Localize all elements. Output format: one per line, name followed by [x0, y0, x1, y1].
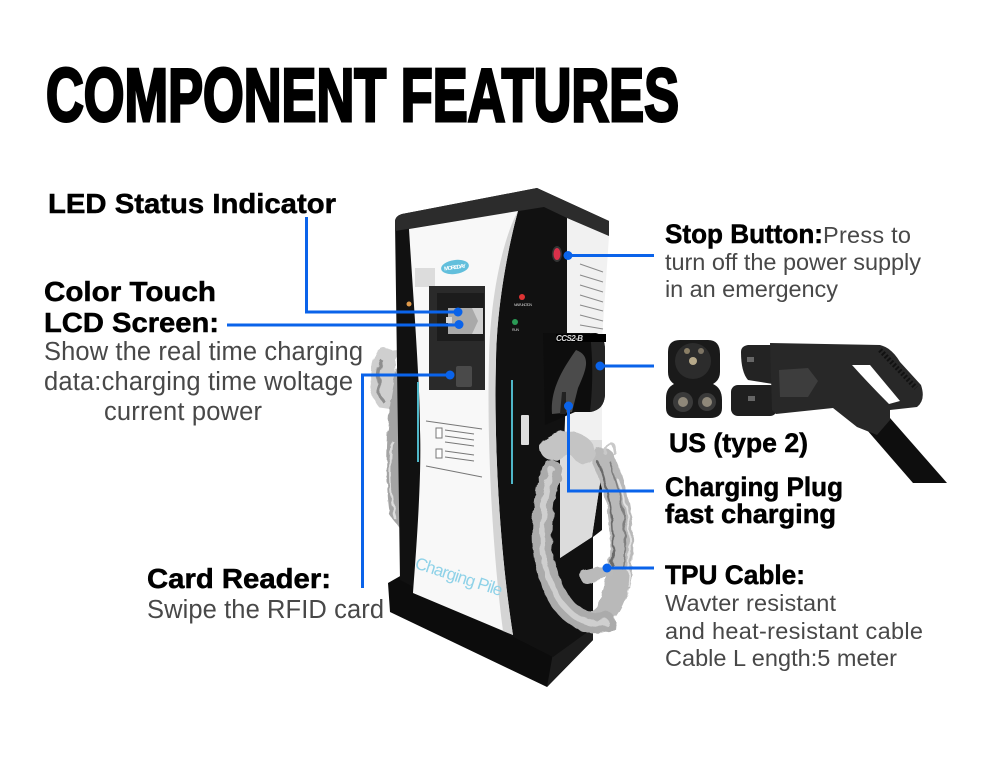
- label: color touch LCD screen: Show the real time charging: [44, 338, 363, 366]
- label: color touch LCD screen: data:charging time woltage: [44, 368, 353, 396]
- side vent panel: [560, 218, 609, 558]
- label: TPU cable: TPU Cable:: [665, 560, 805, 590]
- brand badge: MOREDAY: [444, 263, 467, 272]
- line: plug holster: [596, 362, 654, 370]
- front panel status lights: RUN: [512, 328, 519, 332]
- callout lines: [227, 217, 654, 588]
- cyan light strips: [418, 380, 512, 484]
- door handle: [521, 415, 529, 445]
- label: charging plug: Charging Plug: [665, 472, 843, 502]
- instruction text on panel: [426, 421, 482, 477]
- emergency stop button: [552, 246, 562, 262]
- lower barrel: [731, 385, 777, 416]
- label: card reader: Swipe the RFID card: [147, 596, 384, 624]
- label: card reader: Card Reader:: [147, 563, 331, 594]
- label: stop button: Stop Button:: [665, 219, 823, 249]
- label: charging plug: fast charging: [665, 499, 836, 529]
- front panel status lights: [406, 294, 532, 332]
- line: charging plug: [564, 402, 654, 491]
- charging pile illustration: [371, 188, 630, 687]
- front panel status lights: MALFUNCTION: [514, 303, 532, 307]
- CCS charging plug: [731, 343, 947, 483]
- label: color touch LCD screen: [44, 276, 363, 426]
- plug cable: [867, 418, 947, 483]
- upper barrel: [741, 345, 773, 384]
- label: stop button: Press to: [823, 222, 911, 248]
- label: card reader: [147, 563, 384, 624]
- label: TPU cable: and heat-resistant cable: [665, 618, 923, 644]
- base plinth: [388, 575, 593, 687]
- left cable in plastic wrap: [371, 348, 408, 532]
- plug holster: [543, 333, 606, 425]
- cabinet body: [395, 188, 609, 657]
- label: US type 2: US (type 2): [669, 428, 808, 458]
- line: TPU cable: [602, 564, 654, 572]
- white front panel: [409, 211, 518, 635]
- line: card reader: [362, 370, 454, 588]
- label: LED status indicator: LED Status Indicator: [48, 188, 336, 219]
- label: stop button: turn off the power supply: [665, 249, 921, 275]
- connector front view: [666, 340, 722, 418]
- notice sticker: [415, 268, 435, 287]
- plug handle and body: [770, 343, 923, 435]
- touch screen housing: [429, 286, 485, 390]
- label: color touch LCD screen: Color Touch: [44, 276, 216, 307]
- label: TPU cable: Wavter resistant: [665, 590, 836, 616]
- label: charging plug: [665, 472, 843, 529]
- label: stop button: in an emergency: [665, 276, 838, 302]
- line: LCD screen: [227, 320, 464, 329]
- right cable in plastic wrap: [542, 443, 630, 623]
- label: stop button: [665, 219, 921, 302]
- line: stop button: [564, 251, 654, 260]
- brand badge: [440, 258, 470, 276]
- plug holster: CCS2-B: [556, 334, 583, 343]
- label: TPU cable: Cable L ength:5 meter: [665, 645, 897, 671]
- label: TPU cable: [665, 560, 923, 671]
- charging pile label on panel: Charging Pile: [413, 554, 506, 600]
- label: color touch LCD screen: LCD Screen:: [44, 307, 219, 338]
- label: color touch LCD screen: current power: [104, 398, 262, 426]
- line: LED status indicator: [306, 217, 462, 316]
